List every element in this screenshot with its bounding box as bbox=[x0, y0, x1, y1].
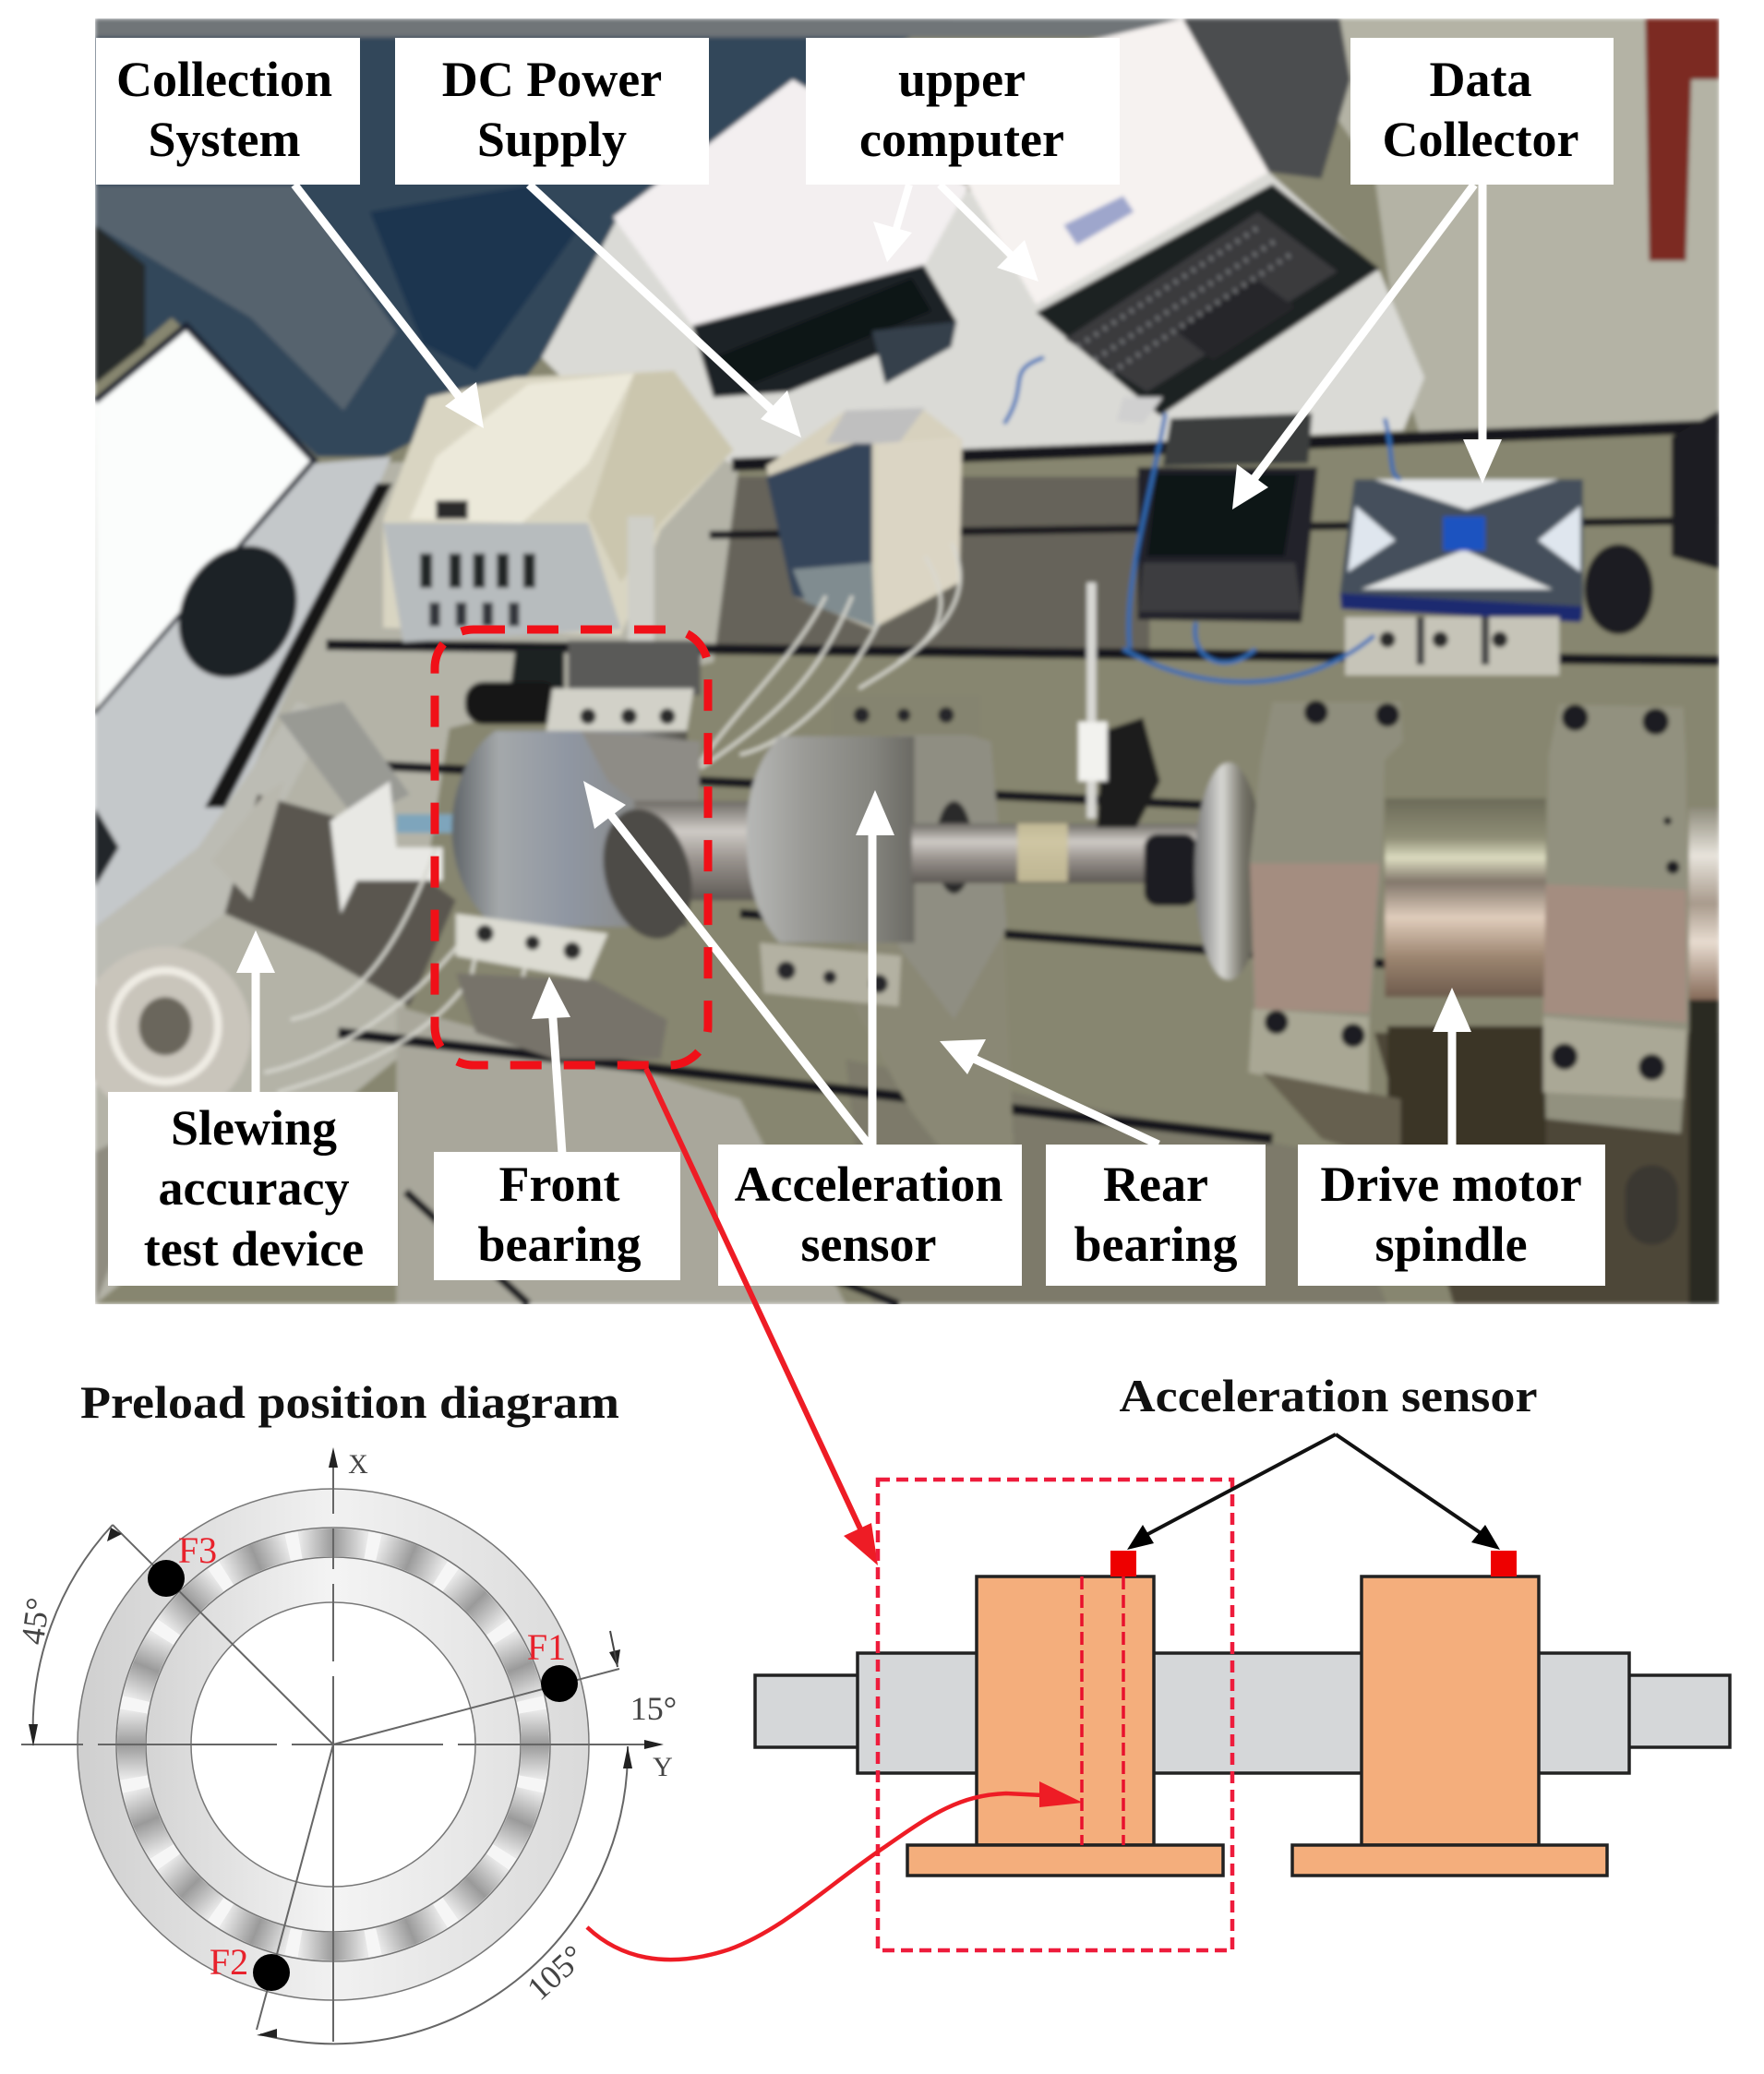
chart: bearing preload diagram: F2 bbox=[210, 1941, 248, 1983]
diagram: spindle schematic bbox=[755, 1434, 1730, 1950]
sensor left bbox=[1110, 1551, 1136, 1576]
label: DC Power Supply: DC Power bbox=[442, 52, 662, 107]
label: upper computer: upper bbox=[898, 52, 1026, 107]
label: Acceleration sensor bbox=[718, 1145, 1022, 1286]
heading: Preload position diagram: Preload position diagram bbox=[80, 1376, 619, 1428]
label: Slewing accuracy test device bbox=[108, 1092, 398, 1286]
photo: wire coil bbox=[95, 947, 251, 1097]
photo: front laptop bbox=[965, 18, 1271, 305]
chart: bearing preload diagram: F1 bbox=[527, 1626, 566, 1668]
rear bearing block bbox=[1362, 1576, 1539, 1845]
photo: rear flange bbox=[898, 715, 1007, 1020]
photo: spindle flange bbox=[1194, 762, 1264, 980]
arrow: red curve from bearing to section bbox=[587, 1781, 1083, 1960]
photo: red chair leg bbox=[1645, 18, 1719, 261]
shaft wide bbox=[858, 1653, 1629, 1773]
heading: Acceleration sensor: Acceleration sensor bbox=[1119, 1370, 1538, 1421]
label: Collection System bbox=[96, 38, 360, 185]
photo: coupling shaft bbox=[912, 823, 1203, 883]
label: Drive motor spindle: spindle bbox=[1374, 1217, 1528, 1272]
label: upper computer: computer bbox=[859, 112, 1064, 167]
label: DC Power Supply bbox=[395, 38, 709, 185]
photo: rear laptop bbox=[613, 79, 968, 326]
sensor right bbox=[1491, 1551, 1517, 1576]
label: Front bearing bbox=[434, 1152, 680, 1280]
preload points bbox=[148, 1560, 185, 1597]
black arrows to sensors bbox=[1127, 1434, 1500, 1550]
arrow: upper computer right bbox=[940, 185, 1038, 282]
label: Rear bearing: bearing bbox=[1074, 1217, 1238, 1272]
photo: T-slots bbox=[327, 426, 1719, 1304]
callout: red dashed box on front bearing bbox=[435, 629, 708, 1065]
photo: bench base bbox=[95, 18, 1719, 1304]
photo: blue tarp bbox=[95, 18, 952, 457]
section dashes bbox=[1082, 1576, 1123, 1845]
label: Acceleration sensor: Acceleration bbox=[735, 1157, 1002, 1212]
photo: right spindle housing bbox=[1543, 704, 1688, 1133]
photo: DC power supply bbox=[766, 411, 962, 629]
photo: white desk bbox=[542, 172, 1424, 463]
photo: drive motor spindle bbox=[1385, 798, 1546, 997]
arrow: Front bearing bbox=[532, 977, 570, 1154]
label: Acceleration sensor: sensor bbox=[801, 1217, 936, 1272]
arrow: Acceleration sensor to rear bbox=[856, 790, 894, 1145]
arrow: Data Collector right bbox=[1463, 185, 1502, 484]
shaft narrow bbox=[755, 1675, 1730, 1747]
angle labels: 15° bbox=[630, 1690, 677, 1727]
axes bbox=[21, 1451, 657, 2044]
photo: probe and black mount bbox=[1097, 717, 1160, 828]
arrow: Drive motor spindle bbox=[1433, 988, 1471, 1145]
label: Drive motor spindle bbox=[1298, 1145, 1605, 1286]
label: Collection System: System bbox=[149, 112, 301, 167]
rollers bbox=[131, 1542, 535, 1947]
label: Rear bearing: Rear bbox=[1103, 1157, 1208, 1212]
red dashed detail box bbox=[878, 1480, 1232, 1950]
photo: slewing accuracy test device bbox=[95, 703, 306, 983]
panel: test rig photo bbox=[79, 18, 1719, 1304]
arrow: Acceleration sensor to front bbox=[583, 781, 869, 1145]
photo: data collector bbox=[1340, 479, 1583, 619]
chart: bearing preload diagram: 105° bbox=[520, 1937, 592, 2008]
photo: left spindle housing bbox=[1248, 701, 1402, 1015]
chart: bearing preload diagram bbox=[14, 1447, 677, 2044]
dimension arcs bbox=[33, 1525, 113, 1743]
arrow: red pointer from photo to schematic bbox=[646, 1069, 878, 1565]
label: Slewing accuracy test device: Slewing bbox=[171, 1100, 337, 1156]
point labels: F3 bbox=[178, 1529, 217, 1571]
arrow: Collection System bbox=[294, 185, 484, 428]
axis arrowheads bbox=[29, 1447, 664, 2038]
photo: black data box bbox=[1163, 414, 1312, 466]
chart: bearing preload diagram: X bbox=[348, 1449, 368, 1480]
photo: wires bbox=[1004, 357, 1400, 682]
chart: bearing preload diagram: Y bbox=[653, 1752, 673, 1782]
label: Front bearing: Front bbox=[498, 1157, 620, 1212]
front bearing block bbox=[977, 1576, 1154, 1845]
label: upper computer bbox=[806, 38, 1120, 185]
photo: rear bearing housing bbox=[890, 931, 1015, 1145]
arrow: upper computer left bbox=[873, 185, 912, 262]
chart: bearing preload diagram: 45° bbox=[14, 1596, 56, 1647]
arrow: Data Collector left bbox=[1232, 185, 1474, 510]
radial lines bbox=[113, 1525, 333, 1744]
photo: right table area bbox=[1337, 18, 1719, 436]
arrow: DC Power Supply bbox=[529, 185, 801, 438]
label: DC Power Supply: Supply bbox=[477, 112, 627, 167]
rear base bbox=[1292, 1845, 1607, 1876]
label: Front bearing: bearing bbox=[477, 1217, 642, 1272]
front base bbox=[907, 1845, 1223, 1876]
label: Collection System: Collection bbox=[116, 52, 332, 107]
photo: left monitor bbox=[95, 326, 315, 708]
label: Slewing accuracy test device: accuracy bbox=[159, 1160, 349, 1216]
photo: collection system bbox=[383, 371, 733, 636]
arrow: Slewing test device bbox=[236, 930, 275, 1098]
arrow group: white callout arrows bbox=[236, 185, 1502, 1154]
label: Drive motor spindle: Drive motor bbox=[1320, 1157, 1582, 1212]
label: Data Collector: Data bbox=[1430, 52, 1531, 107]
photo: rear bearing cylinder bbox=[897, 717, 962, 736]
label: Data Collector bbox=[1350, 38, 1614, 185]
photo: black cables behind front bearing bbox=[569, 641, 701, 695]
photo: front bearing bbox=[456, 973, 667, 1060]
label: Data Collector: Collector bbox=[1383, 112, 1578, 167]
arrow: Rear bearing bbox=[940, 1039, 1158, 1145]
label: Rear bearing bbox=[1046, 1145, 1266, 1286]
label: Slewing accuracy test device: test device bbox=[144, 1221, 364, 1277]
